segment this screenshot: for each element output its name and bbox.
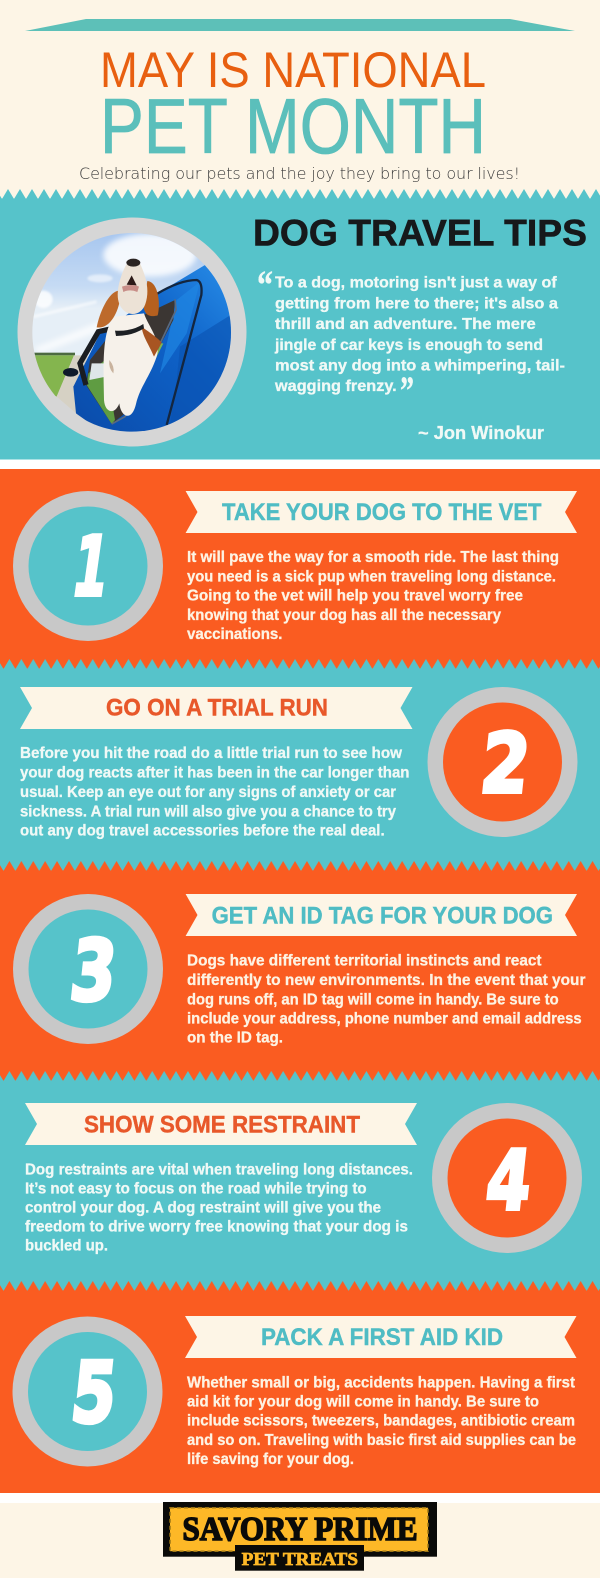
body text: It’s not easy to focus on the road while trying to xyxy=(25,1180,367,1197)
quote: jingle of car keys is enough to send xyxy=(274,337,543,354)
photo: dog leaning out of blue car window xyxy=(18,218,246,446)
quote: thrill and an adventure. The mere xyxy=(275,316,536,333)
body text: freedom to drive worry free knowing that your dog is xyxy=(25,1219,408,1236)
number badge 1 xyxy=(13,491,163,641)
body text: Before you hit the road do a little trial run to see how xyxy=(20,745,403,762)
tagline: Celebrating our pets and the joy they bring to our lives! xyxy=(79,164,520,183)
body text: Whether small or big, accidents happen. Having a first xyxy=(187,1374,576,1391)
number badge 1: 1 xyxy=(67,520,114,615)
body text xyxy=(187,1374,576,1468)
body text: knowing that your dog has all the necessary xyxy=(187,607,501,624)
body text: you need is a sick pup when traveling long distance. xyxy=(187,568,556,585)
ribbon heading: GET AN ID TAG FOR YOUR DOG xyxy=(212,902,553,929)
body text xyxy=(25,1161,413,1255)
body text xyxy=(20,745,410,839)
body text: control your dog. A dog restraint will give you the xyxy=(25,1200,381,1217)
ribbon heading xyxy=(186,491,577,533)
body text xyxy=(187,549,559,643)
number badge 4 xyxy=(432,1103,582,1253)
quote: most any dog into a whimpering, tail- xyxy=(275,358,565,375)
white gap xyxy=(0,460,600,470)
body text: aid kit for your dog will come in handy. Be sure to xyxy=(187,1394,539,1411)
body text: Going to the vet will help you travel worry free xyxy=(187,588,523,605)
panel: tip 1 xyxy=(0,469,600,659)
number badge 5: 5 xyxy=(67,1344,121,1442)
body text: Dogs have different territorial instincts and react xyxy=(187,953,542,970)
number badge 4: 4 xyxy=(482,1134,536,1229)
body text: your dog reacts after it has been in the car longer than xyxy=(20,765,410,782)
body text: buckled up. xyxy=(25,1238,108,1255)
quote: getting from here to there; it's also a xyxy=(275,295,558,312)
number badge 2 xyxy=(428,687,578,837)
number badge 2: 2 xyxy=(476,717,534,812)
number badge 3 xyxy=(13,894,163,1044)
body text: differently to new environments. In the event that your xyxy=(187,972,586,989)
white gap above footer xyxy=(0,1493,600,1503)
attribution: ~ Jon Winokur xyxy=(418,422,544,443)
logo: Savory Prime Pet Treats xyxy=(163,1502,437,1571)
ribbon heading xyxy=(186,894,577,936)
ribbon heading xyxy=(25,1103,417,1145)
body text: usual. Keep an eye out for any signs of anxiety or car xyxy=(20,784,396,801)
body text: It will pave the way for a smooth ride. The last thing xyxy=(187,549,559,566)
body text: include your address, phone number and email address xyxy=(187,1010,582,1027)
opening quote mark: “ xyxy=(257,262,273,307)
panel: tip 2 xyxy=(0,659,600,862)
quote: wagging frenzy. xyxy=(274,378,397,395)
body text: and so on. Traveling with basic first aid supplies can be xyxy=(187,1432,576,1449)
logo wordmark: SAVORY PRIME xyxy=(182,1511,418,1548)
number badge 3: 3 xyxy=(66,922,121,1020)
ribbon heading xyxy=(20,687,412,729)
closing quote mark: ” xyxy=(400,368,414,413)
logo tagline: PET TREATS xyxy=(242,1549,358,1569)
body text: dog runs off, an ID tag will come in handy. Be sure to xyxy=(187,991,559,1008)
top teal bar xyxy=(25,19,575,31)
body text: on the ID tag. xyxy=(187,1029,283,1046)
body text: out any dog travel accessories before the real deal. xyxy=(20,822,385,839)
header xyxy=(25,19,575,183)
heading: dog travel tips: DOG TRAVEL TIPS xyxy=(253,213,587,254)
quote: To a dog, motoring isn't just a way of xyxy=(275,274,557,291)
ribbon heading: PACK A FIRST AID KID xyxy=(261,1324,503,1351)
body text: include scissors, tweezers, bandages, antibiotic cream xyxy=(187,1413,575,1430)
title: Pet Month: PET MONTH xyxy=(100,82,486,170)
panel: dog travel tips intro xyxy=(0,189,600,460)
body text: vaccinations. xyxy=(187,626,282,643)
panel: tip 3 xyxy=(0,861,600,1071)
body text xyxy=(187,953,586,1046)
number badge 5 xyxy=(12,1316,162,1466)
title: May is National: MAY IS NATIONAL xyxy=(100,42,486,98)
ribbon heading: TAKE YOUR DOG TO THE VET xyxy=(222,499,542,526)
body text: Dog restraints are vital when traveling long distances. xyxy=(25,1161,413,1178)
body text: life saving for your dog. xyxy=(187,1451,354,1468)
body text: sickness. A trial run will also give you a chance to try xyxy=(20,803,396,820)
panel: tip 4 xyxy=(0,1071,600,1281)
ribbon heading: SHOW SOME RESTRAINT xyxy=(84,1111,360,1138)
ribbon heading xyxy=(185,1316,576,1358)
quote xyxy=(257,262,565,443)
ribbon heading: GO ON A TRIAL RUN xyxy=(106,695,328,722)
panel: tip 5 xyxy=(0,1281,600,1493)
